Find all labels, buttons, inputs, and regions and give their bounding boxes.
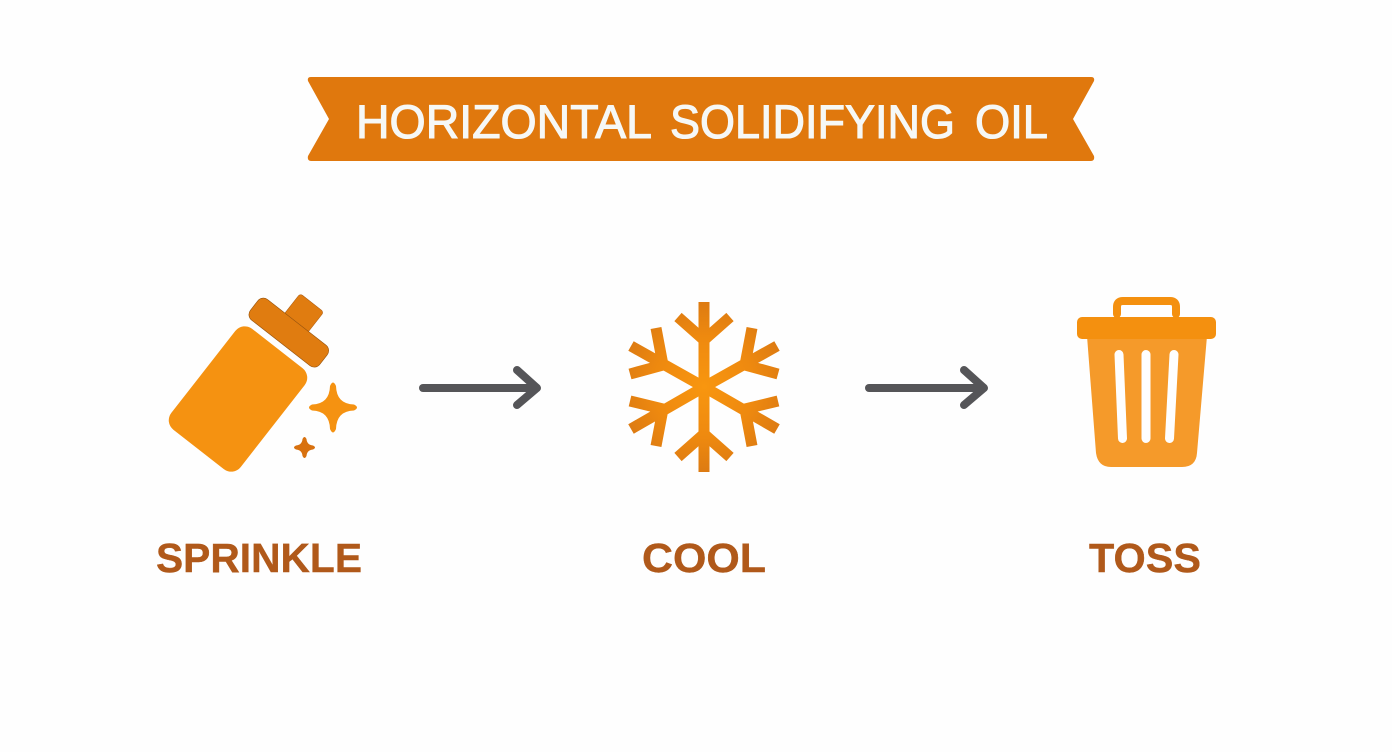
trash can body bbox=[1087, 336, 1207, 467]
arrow: sprinkle to cool bbox=[423, 370, 537, 405]
bottle body bbox=[164, 321, 312, 477]
step 3: toss bbox=[1077, 301, 1216, 581]
trash can lid bbox=[1077, 317, 1216, 339]
icon: snowflake bbox=[630, 302, 778, 472]
label: toss: TOSS bbox=[1089, 535, 1201, 581]
arrow: cool to toss bbox=[869, 370, 984, 405]
step 2: cool bbox=[630, 302, 778, 581]
title text: OIL bbox=[975, 95, 1048, 148]
snowflake arm upper right bbox=[704, 328, 778, 387]
snowflake arm up bbox=[678, 302, 730, 387]
label: sprinkle: SPRINKLE bbox=[156, 535, 362, 581]
label: cool: COOL bbox=[642, 535, 766, 581]
snowflake arm upper left bbox=[630, 328, 704, 387]
trash can slots bbox=[1119, 354, 1174, 438]
icon: small sparkle bbox=[294, 437, 315, 458]
step 1: sprinkle bbox=[156, 294, 362, 581]
title text: SOLIDIFYING bbox=[670, 95, 955, 148]
snowflake arm lower left bbox=[630, 387, 704, 446]
banner ribbon bbox=[308, 77, 1094, 161]
snowflake arm down bbox=[678, 387, 730, 472]
icon: trash can bbox=[1077, 301, 1216, 467]
bottle cap top bbox=[284, 294, 324, 333]
trash can handle bbox=[1117, 301, 1176, 314]
icon: oil bottle bbox=[164, 294, 331, 477]
title text bbox=[356, 95, 1048, 148]
title text: HORIZONTAL bbox=[356, 95, 652, 148]
bottle cap base bbox=[246, 295, 331, 370]
icon: large sparkle bbox=[309, 382, 357, 432]
snowflake arm lower right bbox=[704, 387, 778, 446]
title banner bbox=[308, 77, 1094, 161]
